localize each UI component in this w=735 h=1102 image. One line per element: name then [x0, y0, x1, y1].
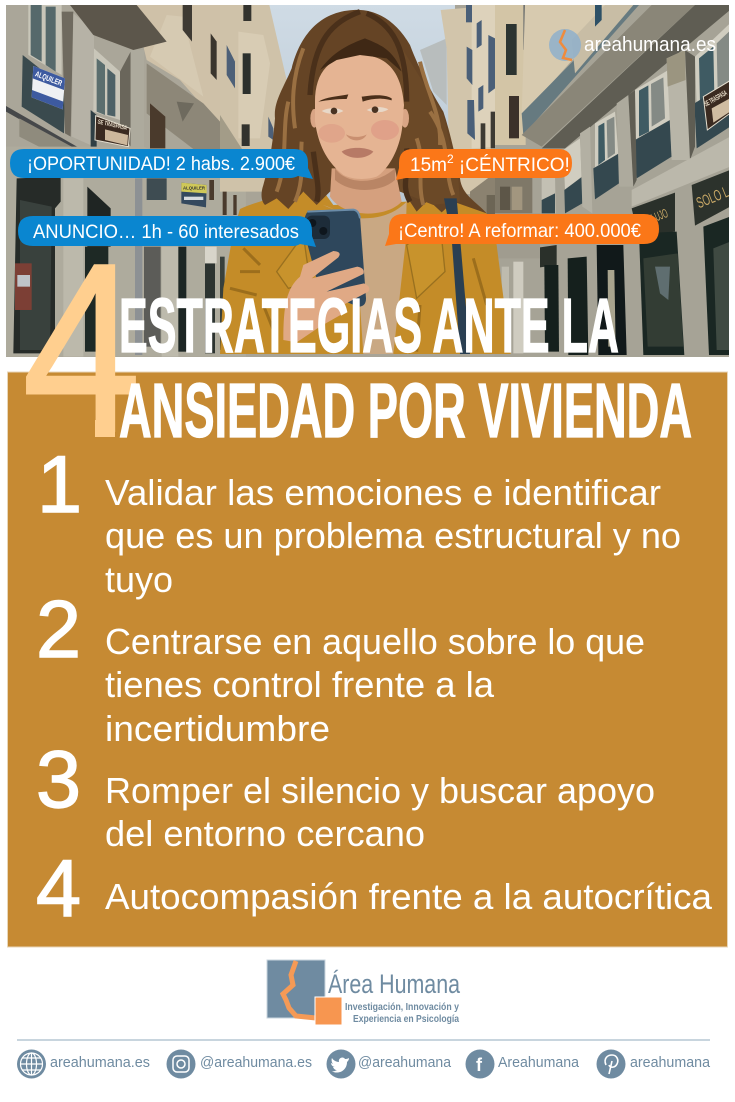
shop front signs: LUJO [649, 206, 670, 225]
woman [220, 10, 511, 354]
strategy 3: del entorno cercano [105, 813, 425, 854]
strategy 2: Centrarse en aquello sobre lo que [105, 621, 645, 662]
strategy 1: que es un problema estructural y no [105, 515, 681, 556]
nose [346, 134, 367, 140]
speech bubble: oportunidad [10, 149, 313, 179]
footer logo: Área Humana: Experiencia en Psicología [353, 1013, 459, 1025]
speech bubble: anuncio: ANUNCIO… 1h - 60 interesados [33, 222, 299, 243]
speech bubble: 15m2 centrico [396, 149, 572, 180]
speech bubble: 15m2 centrico: ¡CÉNTRICO! [454, 155, 570, 176]
strategy 2: tienes control frente a la [105, 664, 495, 705]
social: pinterest [596, 1050, 711, 1078]
strategy 1: Validar las emociones e identificar [105, 472, 661, 513]
watermark logo [549, 29, 716, 61]
speech bubble: anuncio [18, 216, 316, 247]
mouth [342, 148, 373, 158]
strategy 4: Autocompasión frente a la autocrítica [105, 876, 713, 917]
sign: se traspasa right [702, 81, 730, 130]
sign: se traspasa: SE TRASPASA [97, 118, 128, 132]
hero illustration: woman on a city street [6, 3, 735, 358]
social: instagram: @areahumana.es [200, 1054, 312, 1071]
center left and distant buildings [220, 5, 495, 214]
strategy 2 [36, 585, 645, 749]
footer logo: Área Humana: Área Humana [328, 969, 461, 999]
strategy 2: 2 [36, 585, 81, 675]
speech bubble: 15m2 centrico: 15m [410, 155, 447, 176]
sign: se traspasa [95, 116, 130, 147]
big number 4: 4 [22, 213, 141, 483]
social: pinterest: areahumana [630, 1054, 711, 1071]
social: web: areahumana.es [50, 1054, 150, 1071]
social: instagram [166, 1050, 312, 1078]
strategy 4: 4 [36, 844, 81, 934]
main panel [8, 372, 728, 947]
social: facebook [466, 1050, 580, 1078]
strategy 1: tuyo [105, 559, 173, 600]
speech bubble: a reformar [385, 214, 659, 246]
shirt [323, 202, 407, 354]
eyes [322, 106, 388, 114]
shop front signs [540, 170, 732, 267]
social: twitter [326, 1050, 452, 1078]
sign: small alquiler: ALQUILER [183, 185, 206, 190]
face [310, 38, 409, 179]
eyebrows [318, 94, 392, 102]
social: web [17, 1050, 150, 1078]
left street buildings [6, 5, 246, 357]
strategy 3: Romper el silencio y buscar apoyo [105, 770, 655, 811]
sign: alquiler: ALQUILER [34, 69, 63, 88]
title [119, 283, 692, 454]
footer logo: Área Humana: Investigación, Innovación y [345, 1001, 459, 1013]
jacket [220, 189, 511, 354]
strategy 1: 1 [37, 440, 82, 530]
big number 4 [26, 264, 136, 437]
strategy 2: incertidumbre [105, 708, 330, 749]
right street buildings [495, 5, 735, 357]
neck [330, 168, 402, 214]
strategy 3: 3 [36, 735, 81, 825]
phone [304, 209, 366, 307]
social: facebook: f [476, 1055, 483, 1075]
strategy 3 [36, 735, 655, 854]
hand [283, 251, 369, 342]
strategy 1 [37, 440, 681, 600]
social: facebook: Areahumana [498, 1054, 580, 1071]
sign: alquiler [32, 66, 65, 109]
speech bubble: 15m2 centrico: 2 [447, 152, 454, 166]
speech bubble: oportunidad: ¡OPORTUNIDAD! 2 habs. 2.900€ [27, 154, 295, 175]
watermark logo: areahumana.es [584, 34, 716, 56]
footer logo: Área Humana [267, 960, 461, 1025]
strategy 4 [36, 844, 713, 934]
strap [444, 198, 470, 354]
speech bubble: a reformar: ¡Centro! A reformar: 400.000€ [398, 221, 641, 242]
hair [262, 10, 487, 213]
sign: small alquiler [181, 183, 207, 207]
social: twitter: @areahumana [358, 1054, 452, 1071]
